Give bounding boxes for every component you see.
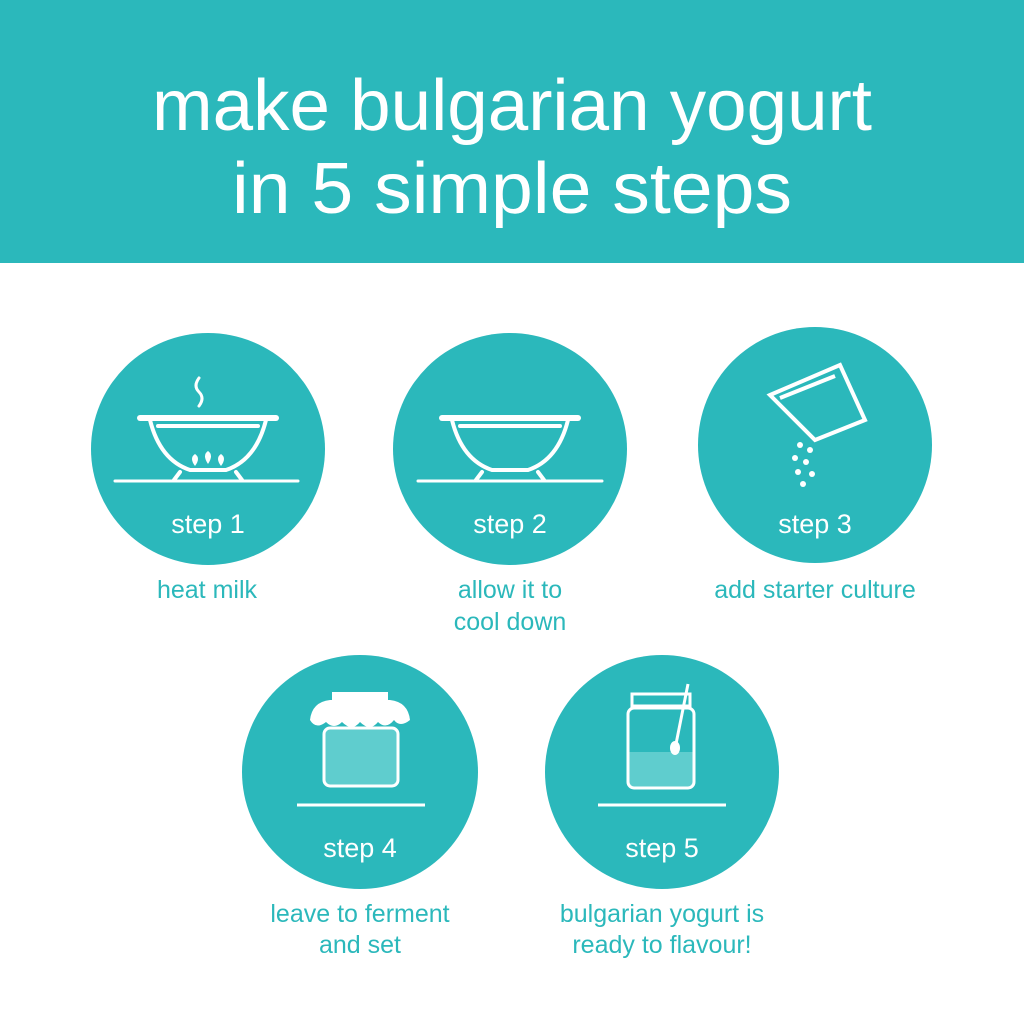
title xyxy=(152,66,872,229)
step 2: step 2 xyxy=(473,509,547,539)
step 2 xyxy=(393,333,627,565)
icon: pot on stove xyxy=(115,378,298,481)
icon: covered jar xyxy=(297,692,425,805)
step 1: step 1 xyxy=(171,509,245,539)
step 5 caption: bulgarian yogurt is xyxy=(560,900,764,928)
header band xyxy=(0,0,1024,263)
step 4 xyxy=(242,655,478,889)
step 3 caption: add starter culture xyxy=(714,576,916,604)
icon: cooling pot xyxy=(418,418,602,481)
step 1 caption: heat milk xyxy=(157,576,258,604)
step 1 xyxy=(91,333,325,565)
step 4: step 4 xyxy=(323,833,397,863)
step 5 xyxy=(545,655,779,889)
icon: culture sachet xyxy=(770,365,865,440)
title: make bulgarian yogurt xyxy=(152,66,872,146)
step 3: step 3 xyxy=(778,509,852,539)
step 5 caption: ready to flavour! xyxy=(572,931,752,959)
step 4 caption: leave to ferment xyxy=(270,900,450,928)
title: in 5 simple steps xyxy=(232,149,792,229)
step 4 caption xyxy=(270,900,450,959)
step 4 caption: and set xyxy=(319,931,401,959)
step 5 caption xyxy=(560,900,764,959)
step 2 caption: allow it to xyxy=(458,576,562,604)
step 2 caption: cool down xyxy=(454,608,566,636)
step 5: step 5 xyxy=(625,833,699,863)
icon: yogurt jar with spoon xyxy=(598,684,726,805)
step 2 caption xyxy=(454,576,566,636)
step 3 xyxy=(698,327,932,563)
